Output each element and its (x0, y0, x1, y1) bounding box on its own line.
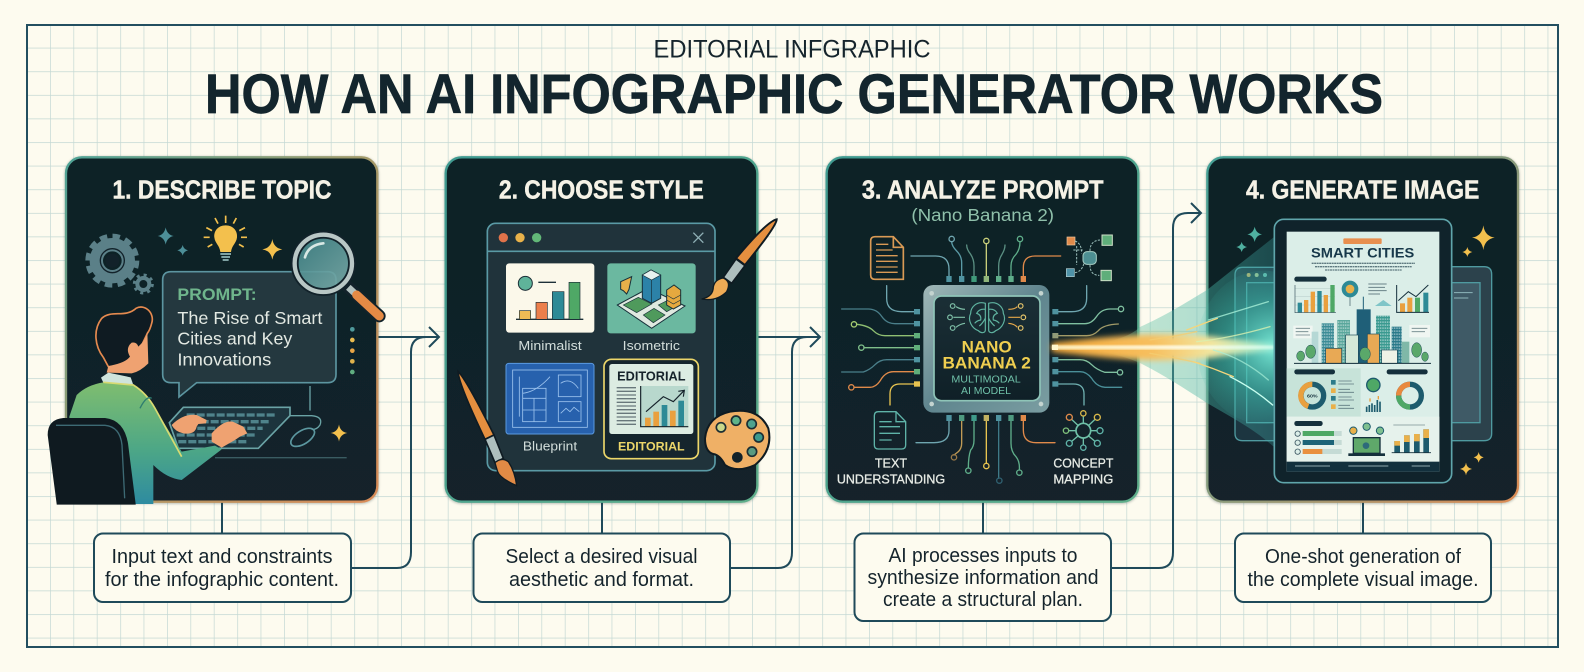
figure: person typing (48, 307, 247, 504)
poster donut one (1301, 384, 1324, 407)
poster line chart (1397, 285, 1429, 312)
caption 2: aesthetic and format. (509, 569, 694, 591)
connector: card 4 to caption 4 (1362, 500, 1364, 533)
card title: 3. ANALYZE PROMPT (862, 174, 1104, 204)
caption 1 (94, 534, 351, 602)
panel: 4. generate image (1207, 157, 1518, 502)
tablet with generated infographic (1274, 219, 1452, 483)
card title: 2. CHOOSE STYLE (499, 174, 704, 204)
poster stacked bars (1392, 425, 1431, 453)
style: minimalist: Minimalist (518, 339, 582, 353)
card title: 4. GENERATE IMAGE (1246, 174, 1479, 204)
style picker window (487, 223, 715, 471)
chip pins (914, 276, 1058, 421)
poster laptop (1348, 423, 1385, 456)
style: editorial (selected) (604, 359, 698, 459)
style: minimalist (506, 263, 594, 353)
icon: document input (871, 237, 903, 279)
poster donut two (1399, 384, 1421, 407)
chip label: AI MODEL (961, 386, 1011, 397)
back window right (1450, 267, 1492, 441)
poster footer (1287, 462, 1439, 472)
label: concept mapping: MAPPING (1053, 472, 1113, 486)
caption 3 (854, 534, 1111, 621)
style: editorial (selected): EDITORIAL (617, 370, 686, 384)
style: editorial (selected): EDITORIAL (618, 440, 685, 454)
icon: brain (948, 303, 1026, 333)
card subtitle: (Nano Banana 2) (911, 205, 1054, 225)
caption 3: synthesize information and (868, 567, 1098, 589)
label: text understanding: TEXT (875, 457, 907, 471)
light beam from chip to tablet (1052, 237, 1330, 447)
label: text understanding: UNDERSTANDING (837, 472, 945, 486)
poster donut one: 60% (1307, 393, 1318, 399)
arrow: step 1 to step 2 (351, 327, 439, 568)
circuit traces (842, 236, 1124, 483)
icon: paintbrush top right (702, 219, 777, 300)
poster progress bars (1295, 431, 1342, 454)
poster legend (1331, 380, 1354, 409)
label: text understanding (837, 457, 945, 486)
style: blueprint: Blueprint (523, 440, 578, 454)
arrow: step 2 to step 3 (730, 327, 820, 568)
heading: eyebrow: EDITORIAL INFGRAPHIC (654, 36, 930, 64)
label: concept mapping (1053, 457, 1114, 486)
caption 4: One-shot generation of (1265, 546, 1461, 568)
style: blueprint (506, 363, 594, 454)
chip label: NANO (962, 338, 1012, 357)
poster pills (1294, 277, 1428, 426)
icon: text document (874, 412, 906, 449)
caption 3: create a structural plan. (883, 589, 1083, 611)
poster city skyline (1293, 297, 1431, 363)
panel: 3. analyze prompt (827, 157, 1138, 502)
caption 3: AI processes inputs to (888, 545, 1078, 567)
prompt text (177, 308, 322, 370)
prompt text: Innovations (177, 350, 271, 370)
card title: 1. DESCRIBE TOPIC (112, 174, 332, 204)
connector: card 1 to caption 1 (221, 500, 223, 533)
style: isometric (607, 263, 696, 353)
panel: 1. describe topic (48, 157, 379, 504)
connector: card 3 to caption 3 (982, 500, 984, 533)
chip label (942, 338, 1031, 397)
chip: nano banana 2 (923, 285, 1049, 413)
sparkles (1236, 225, 1495, 475)
panel: 2. choose style (446, 157, 777, 502)
poster title: SMART CITIES (1311, 245, 1414, 261)
icon: concept map (1063, 411, 1103, 450)
caption 4: the complete visual image. (1248, 569, 1478, 591)
style: isometric: Isometric (623, 339, 680, 353)
arrow: step 3 to step 4 (1111, 203, 1201, 568)
callout: prompt bubble (163, 272, 336, 397)
icon: lightbulb (204, 216, 247, 260)
poster bar chart (1295, 285, 1336, 313)
caption 2 (474, 534, 730, 602)
icon: network diagram (1066, 235, 1112, 281)
chip label: BANANA 2 (942, 353, 1031, 372)
icon: paintbrush bottom left (458, 371, 517, 486)
icon: palette (705, 411, 769, 469)
caption 4 (1235, 534, 1491, 602)
prompt label: PROMPT: (177, 285, 257, 304)
status dots (350, 327, 355, 374)
prompt text: Cities and Key (177, 329, 292, 349)
caption 2: Select a desired visual (506, 546, 698, 568)
icon: gears (88, 237, 152, 293)
heading: main title: HOW AN AI INFOGRAPHIC GENERATOR WORKS (205, 62, 1383, 125)
label: concept mapping: CONCEPT (1053, 457, 1114, 471)
poster badge (1342, 281, 1387, 306)
connector: card 2 to caption 2 (601, 500, 603, 533)
chip label: MULTIMODAL (951, 375, 1021, 386)
caption 1: Input text and constraints (112, 546, 332, 568)
icon: sparkles (158, 227, 347, 442)
prompt text: The Rise of Smart (177, 308, 322, 328)
caption 1: for the infographic content. (105, 569, 339, 591)
icon: keyboard and mouse (169, 386, 347, 458)
poster mini charts (1367, 378, 1380, 412)
icon: magnifying glass (295, 235, 379, 316)
back window left (1235, 267, 1277, 441)
